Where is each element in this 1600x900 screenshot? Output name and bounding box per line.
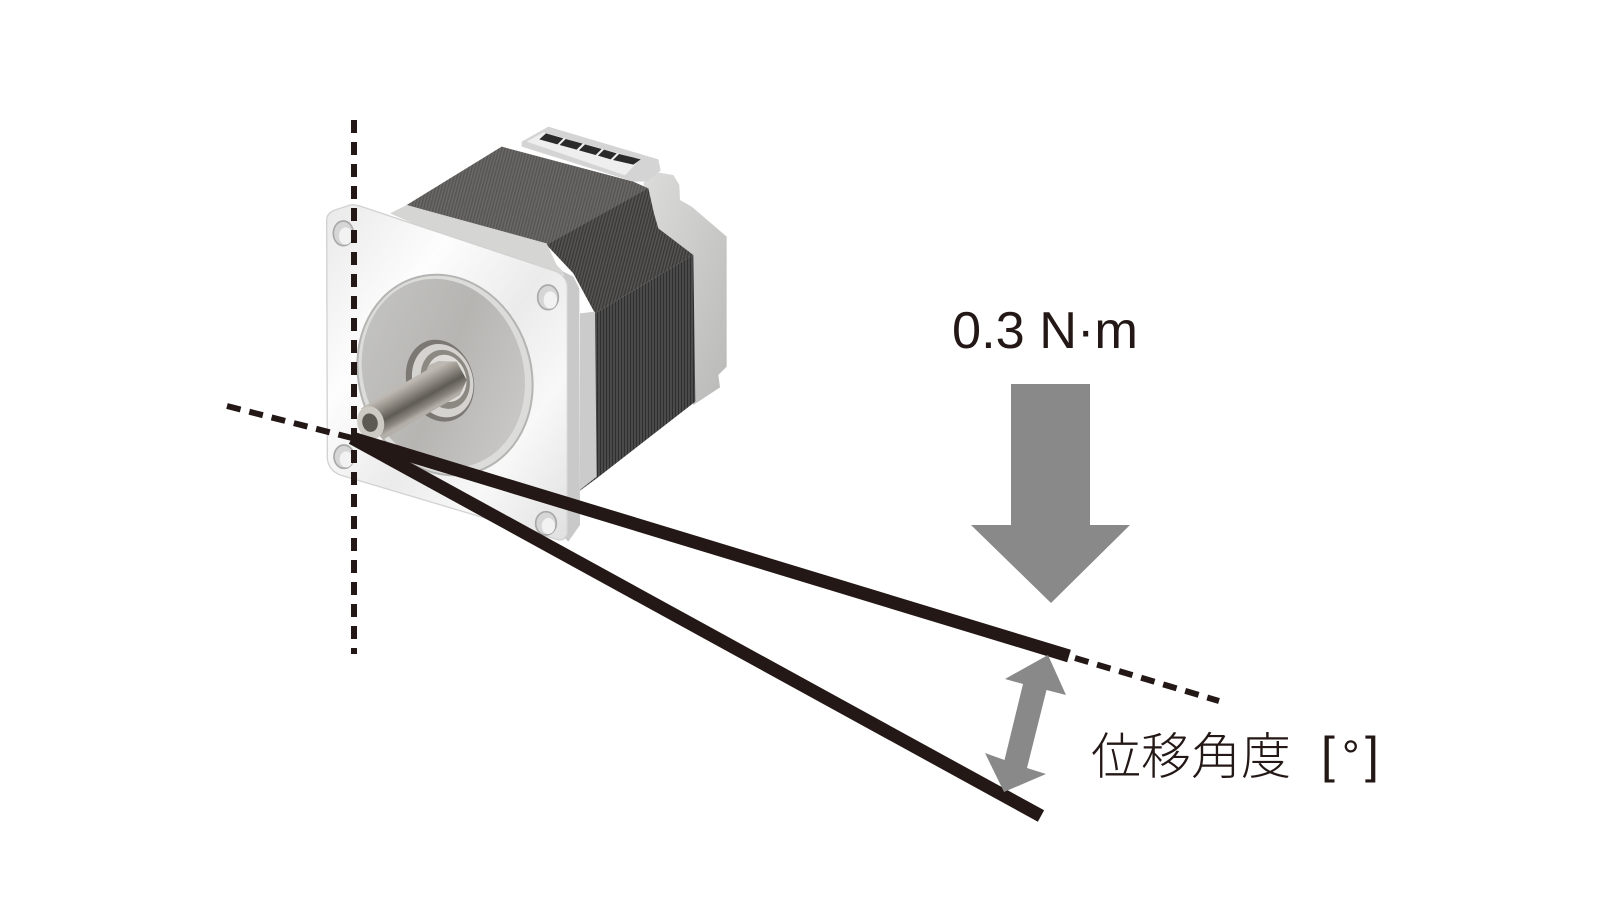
flange side — [563, 272, 580, 542]
dashed extension — [1075, 658, 1219, 701]
motor photo — [327, 127, 727, 542]
shaft end — [353, 403, 388, 442]
displacement angle label — [1091, 727, 1379, 785]
motor rear bracket — [643, 172, 727, 405]
body top light strip — [390, 205, 567, 275]
displacement angle label: [ — [1321, 727, 1335, 783]
vertical dashed axis — [351, 120, 357, 654]
flange face — [327, 205, 567, 540]
laminations top — [407, 147, 653, 247]
laminations chamfer — [547, 188, 693, 313]
mounting holes — [333, 221, 558, 535]
motor body side — [580, 312, 597, 490]
displaced line — [352, 438, 1041, 816]
laminations side — [580, 255, 695, 491]
reference line — [352, 438, 1069, 656]
displacement angle label: ] — [1365, 727, 1379, 783]
shaft — [361, 361, 467, 439]
horizontal dashed axis left — [227, 406, 352, 438]
connector — [522, 127, 661, 182]
torque label: 0.3 N·m — [952, 302, 1138, 360]
torque arrow — [971, 384, 1130, 603]
displacement angle label: ° — [1342, 732, 1360, 781]
displacement angle label: 位移角度 — [1091, 729, 1291, 785]
displacement arrow — [985, 655, 1066, 792]
pilot boss — [332, 252, 558, 498]
bearing — [395, 331, 485, 431]
